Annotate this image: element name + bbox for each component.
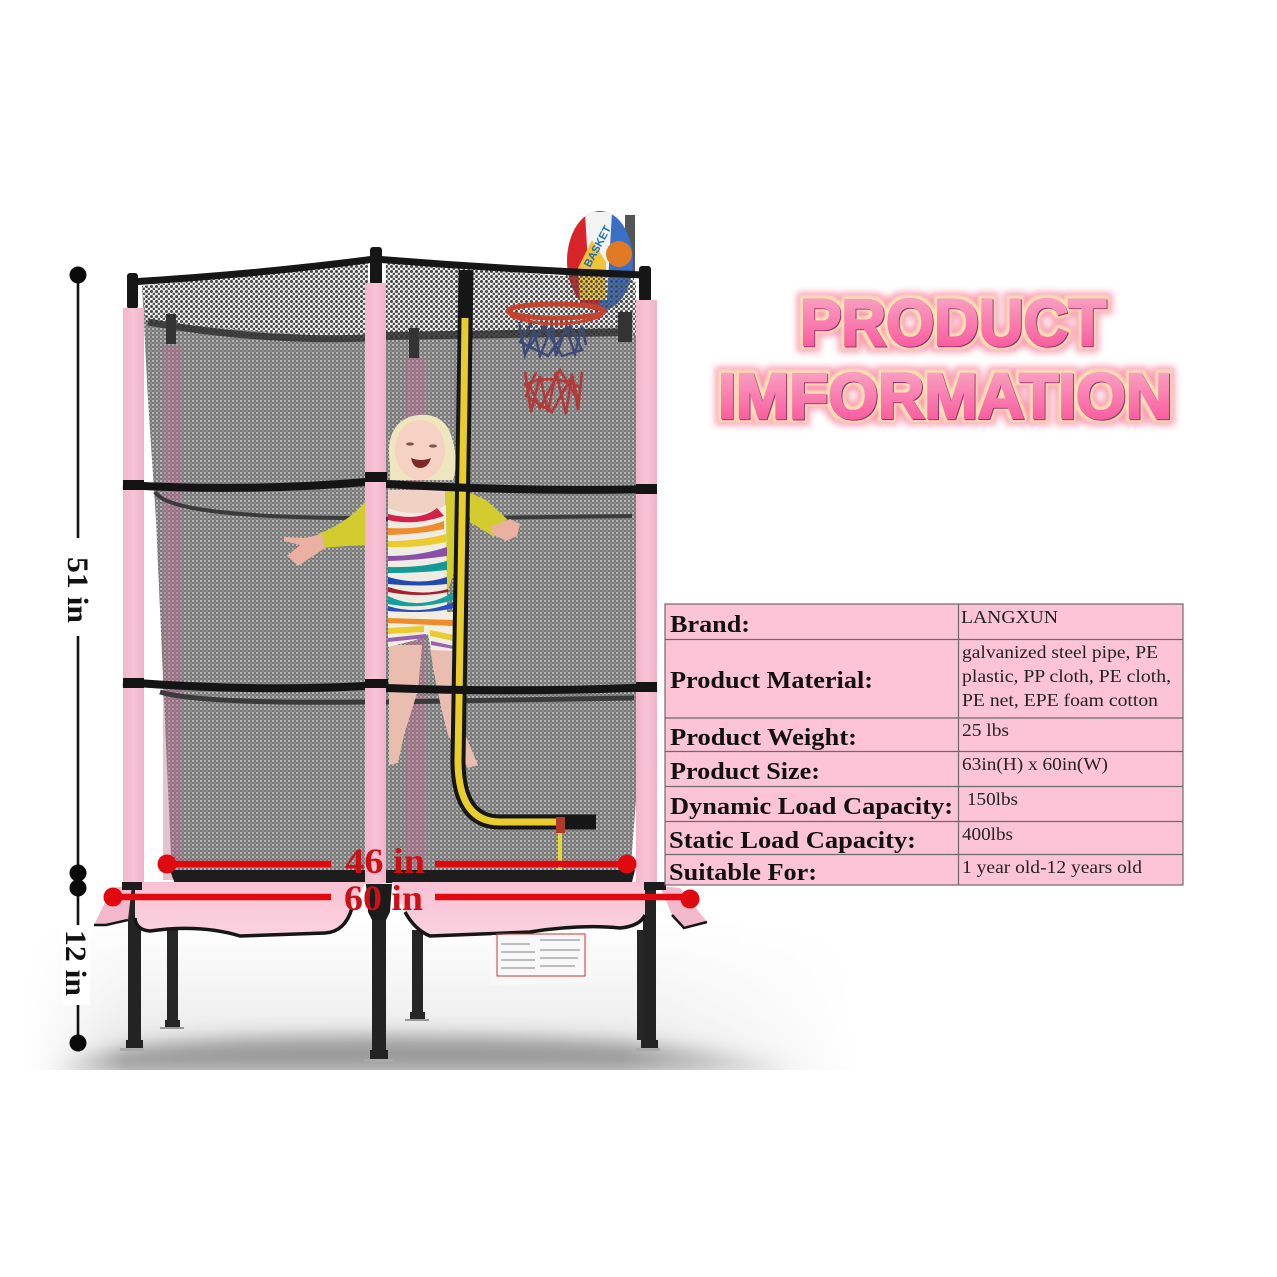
basketball backboard (565, 210, 636, 315)
cardigan (445, 490, 456, 590)
row: static load capacity: Static Load Capacity: (669, 828, 916, 854)
row: suitable for: Suitable For: (669, 860, 817, 886)
foam pole center (365, 247, 388, 883)
row: product size: Product Size: (670, 759, 820, 785)
net panel: right (386, 262, 636, 880)
row: dynamic load capacity: Dynamic Load Capacity: (670, 794, 953, 820)
width dimension: 46 in (158, 841, 636, 881)
right arm (468, 492, 507, 537)
row: product weight: Product Weight: (670, 725, 857, 751)
top frame (130, 259, 646, 282)
net top section: left (142, 262, 368, 340)
left arm (318, 497, 369, 548)
row: product material (670, 642, 1171, 710)
width dimension: 60 in (104, 878, 700, 918)
basketball backboard: BASKET (582, 224, 614, 269)
face (395, 420, 445, 480)
front legs (120, 885, 660, 1062)
child (284, 415, 520, 768)
net top section: right (386, 262, 636, 338)
row: dynamic load capacity: 150lbs (967, 789, 1018, 809)
row: suitable for: 1 year old-12 years old (962, 857, 1142, 877)
height dimension line (59, 266, 94, 1052)
skirt left (135, 882, 366, 936)
trampoline mat (170, 870, 635, 884)
net bands (148, 312, 634, 702)
row: suitable for (669, 857, 1142, 886)
back legs (160, 930, 645, 1040)
product information table (665, 604, 1183, 886)
title (718, 285, 1172, 432)
row: static load capacity (669, 824, 1013, 854)
width dimension: 46 in: 46 in (345, 841, 425, 881)
row: product material: Product Material: (670, 668, 873, 694)
left hand (284, 534, 325, 566)
row: product material: plastic, PP cloth, PE cloth, (962, 666, 1171, 686)
net panel: left (142, 262, 368, 880)
basketball hoop (508, 304, 604, 414)
hair (389, 415, 456, 480)
foam pole right (636, 266, 657, 883)
zipper (458, 270, 596, 874)
right hand (492, 519, 520, 541)
skirt flap right (660, 886, 707, 928)
trampoline (94, 210, 707, 1062)
row: brand: Brand: (670, 612, 750, 638)
net straps (123, 482, 657, 690)
frame joints (122, 882, 666, 920)
label: 12 in: 12 in (59, 930, 92, 996)
skirt flap left (94, 885, 132, 925)
row: brand (670, 607, 1058, 638)
width dimension: 60 in: 60 in (344, 878, 423, 918)
skirt right (392, 882, 645, 937)
row: product size (670, 754, 1108, 785)
row: product material: galvanized steel pipe, PE (962, 642, 1158, 662)
row: product size: 63in(H) x 60in(W) (962, 754, 1108, 775)
legs (389, 645, 422, 765)
row: brand: LANGXUN (961, 607, 1058, 627)
safety label (490, 933, 592, 985)
striped shorts (388, 612, 454, 651)
back poles (163, 345, 425, 880)
floor shadow (0, 915, 1277, 1100)
striped top (388, 505, 454, 612)
neck and shoulders (388, 490, 447, 520)
title: IMFORMATION (718, 360, 1172, 432)
label: 51 in: 51 in (61, 557, 94, 623)
row: dynamic load capacity (670, 789, 1018, 820)
title: PRODUCT (800, 285, 1106, 359)
foam pole left (123, 273, 144, 883)
row: product weight: 25 lbs (962, 720, 1009, 740)
row: static load capacity: 400lbs (962, 824, 1013, 844)
row: product material: PE net, EPE foam cotton (962, 690, 1158, 710)
row: product weight (670, 720, 1009, 751)
